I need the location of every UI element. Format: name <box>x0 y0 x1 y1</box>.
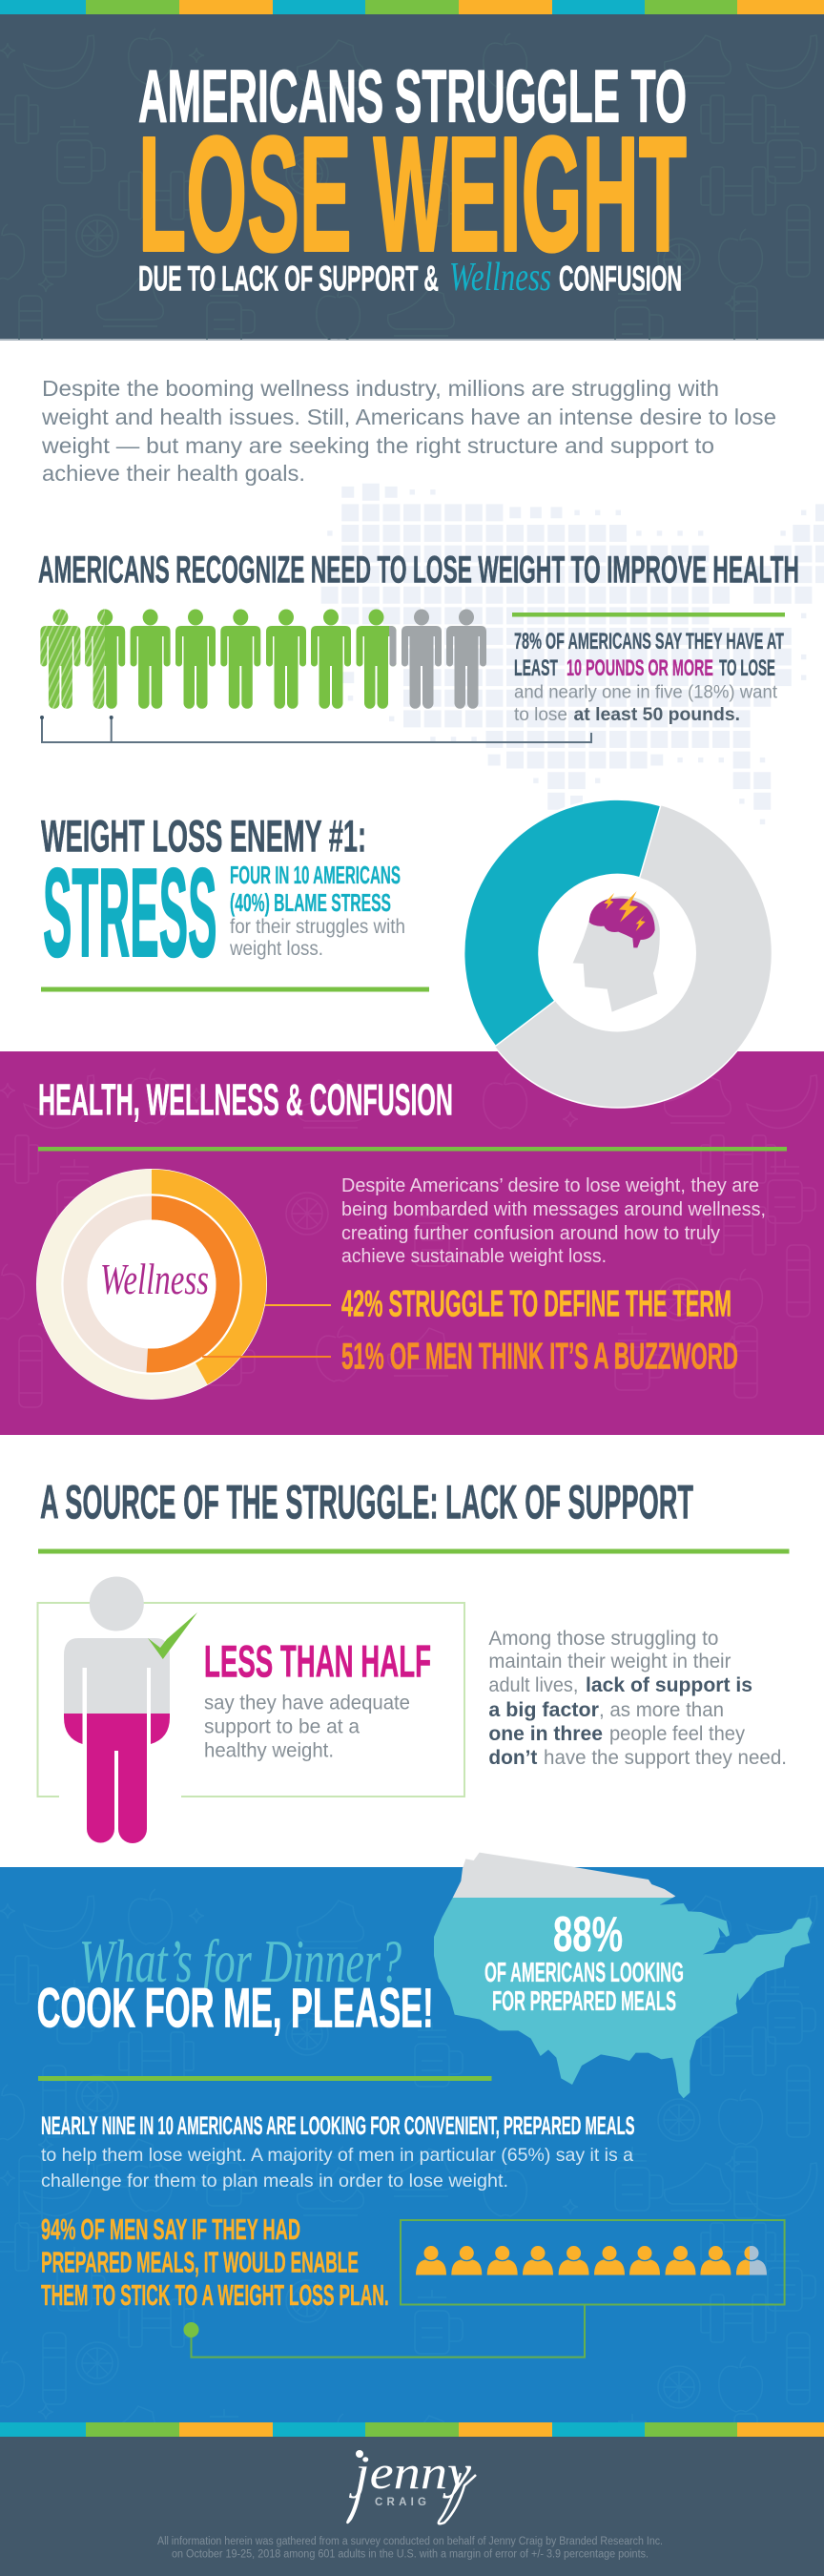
heading: cook for me: COOK FOR ME, PLEASE! <box>37 1977 434 2039</box>
support paragraph: one in three <box>488 1722 603 1745</box>
intro paragraph: Despite the booming wellness industry, millions are struggling with <box>42 376 719 401</box>
stat: 94% of men: THEM TO STICK TO A WEIGHT LOSS PLAN. <box>41 2278 389 2312</box>
title: DUE TO LACK OF SUPPORT & <box>138 260 439 299</box>
header panel <box>0 14 824 367</box>
heading: health wellness confusion: HEALTH, WELLNESS & CONFUSION <box>38 1075 453 1125</box>
map: united states 88%: FOR PREPARED MEALS <box>492 1986 676 2017</box>
support paragraph: Among those struggling to <box>488 1627 718 1650</box>
stat: 78% text block: to lose <box>514 704 567 725</box>
support paragraph: maintain their weight in their <box>488 1650 731 1672</box>
logo: jenny craig: CRAIG <box>375 2497 426 2508</box>
stress stat: FOUR IN 10 AMERICANS <box>230 862 401 889</box>
stress stat: (40%) BLAME STRESS <box>230 890 391 917</box>
map: united states 88% <box>434 1853 813 2098</box>
map: united states 88%: OF AMERICANS LOOKING <box>484 1958 684 1988</box>
prepared meals text: to help them lose weight. A majority of men in particular (65%) say it is a <box>41 2145 633 2166</box>
title <box>138 53 687 300</box>
donut chart 40% stress <box>464 799 772 1108</box>
people icons 94% <box>416 2246 767 2275</box>
stat: 94% of men: PREPARED MEALS, IT WOULD ENABLE <box>41 2245 359 2278</box>
stat: 78% text block <box>512 613 785 725</box>
bracket connector <box>40 716 591 742</box>
wellness paragraph: Despite Americans’ desire to lose weight, they are <box>341 1174 759 1196</box>
stat: 94% of men <box>41 2212 389 2312</box>
less than half: LESS THAN HALF <box>204 1636 431 1687</box>
stat: 78% text block: and nearly one in five (18%) want <box>514 681 778 702</box>
less than half: healthy weight. <box>204 1739 334 1762</box>
text: STRESS <box>43 842 217 983</box>
prepared meals text: challenge for them to plan meals in order to lose weight. <box>41 2171 508 2192</box>
title: Wellness <box>449 256 551 300</box>
heading: what's for dinner: What’s for Dinner? <box>79 1927 402 1995</box>
icon: person half filled <box>64 1576 170 1843</box>
support box <box>38 1603 464 1797</box>
wellness paragraph <box>341 1174 766 1267</box>
title: CONFUSION <box>559 260 682 299</box>
blue panel <box>0 1867 824 2422</box>
intro paragraph <box>41 376 776 486</box>
support paragraph: lack of support is <box>586 1673 752 1696</box>
stat: 78% text block: LEAST <box>514 655 558 681</box>
prepared meals text <box>41 2110 635 2192</box>
footnote: on October 19-25, 2018 among 601 adults in the U.S. with a margin of error of +/- 3.9 percentage points. <box>172 2549 649 2561</box>
heading: weight loss enemy: WEIGHT LOSS ENEMY #1: <box>41 811 366 862</box>
support paragraph: adult lives, <box>488 1673 578 1696</box>
support paragraph: , as more than <box>599 1698 724 1721</box>
map: united states 88%: 88% <box>553 1907 623 1963</box>
stress stat <box>229 862 405 960</box>
people chart: 78% of ten figures <box>40 609 486 709</box>
less than half: support to be at a <box>204 1715 360 1738</box>
icon: head with stressed brain <box>573 891 660 1012</box>
purple panel <box>0 1051 824 1435</box>
wellness paragraph: achieve sustainable weight loss. <box>341 1245 607 1267</box>
green connector and box <box>183 2220 785 2358</box>
stress stat: weight loss. <box>229 938 323 960</box>
leader lines <box>202 1304 331 1358</box>
wellness ring chart: Wellness <box>100 1255 209 1303</box>
support paragraph <box>488 1627 787 1769</box>
colour strip bottom <box>0 2422 824 2437</box>
wellness paragraph: creating further confusion around how to truly <box>341 1222 721 1244</box>
wellness paragraph: being bombarded with messages around wellness, <box>341 1198 766 1220</box>
icon: check mark <box>148 1612 197 1659</box>
intro paragraph: weight — but many are seeking the right structure and support to <box>41 433 714 458</box>
footer panel <box>0 2437 824 2576</box>
stat: 94% of men: 94% OF MEN SAY IF THEY HAD <box>41 2212 300 2246</box>
intro paragraph: weight and health issues. Still, Americans have an intense desire to lose <box>41 405 776 429</box>
footnote: All information herein was gathered from a survey conducted on behalf of Jenny Craig by Branded Research Inc. <box>157 2536 663 2547</box>
less than half: say they have adequate <box>204 1692 410 1714</box>
support paragraph: have the support they need. <box>544 1746 787 1769</box>
stress stat: for their struggles with <box>230 916 405 938</box>
logo: jenny craig <box>347 2445 476 2524</box>
logo: jenny craig: jenny <box>348 2445 472 2499</box>
support paragraph: people feel they <box>609 1722 745 1745</box>
less than half <box>204 1636 431 1762</box>
stat: 78% text block: 10 POUNDS OR MORE <box>566 655 713 681</box>
colour strip top <box>0 0 824 14</box>
world map dot background <box>321 492 824 821</box>
footnote <box>157 2536 663 2561</box>
support paragraph: a big factor <box>488 1698 600 1721</box>
wellness ring chart <box>36 1169 267 1400</box>
intro paragraph: achieve their health goals. <box>42 461 305 486</box>
stat: 78% text block: TO LOSE <box>719 655 775 681</box>
support paragraph: don’t <box>488 1746 537 1769</box>
stat: 78% text block: at least 50 pounds. <box>574 704 740 725</box>
